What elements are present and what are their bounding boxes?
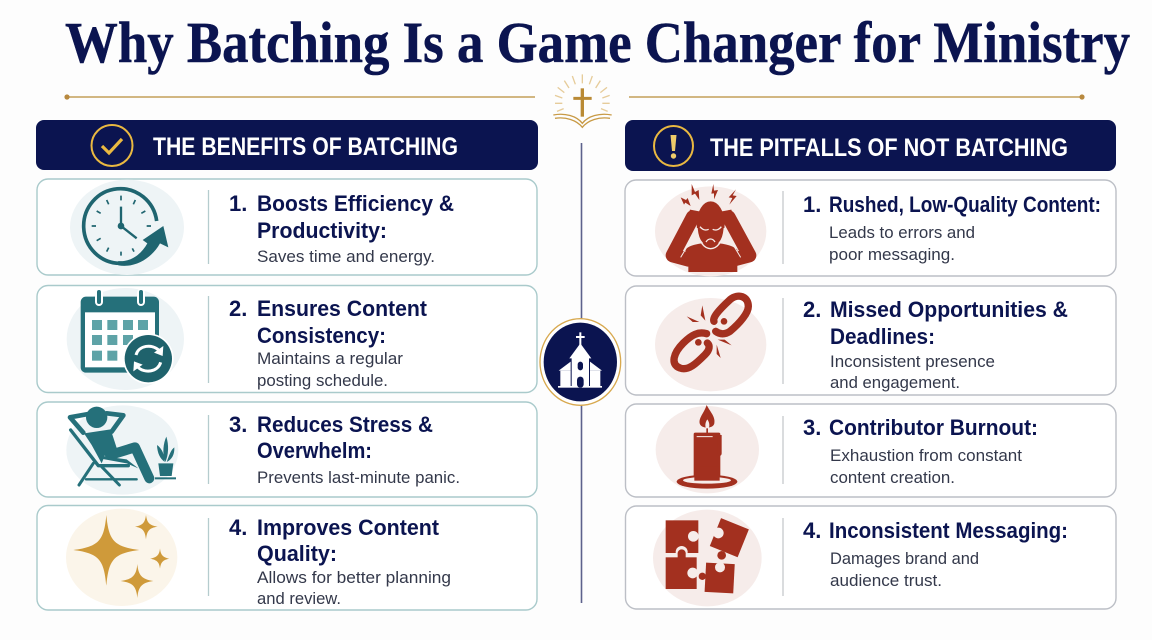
text: pitfall 2: 2.: [803, 297, 821, 322]
card: improves quality: [37, 506, 537, 610]
text: pitfall 4: [803, 518, 1068, 590]
text: benefit 4: [229, 515, 451, 608]
text: benefit 4: and review.: [257, 589, 341, 608]
text: pitfall 4: audience trust.: [830, 571, 942, 590]
icon: stressed person: [655, 184, 766, 276]
text: pitfall 3: content creation.: [830, 468, 955, 487]
text: pitfall 3: [803, 415, 1038, 487]
text: pitfall 2: Inconsistent presence: [830, 352, 995, 371]
text: pitfall 3: 3.: [803, 415, 821, 440]
panel: benefits: [36, 120, 538, 610]
text: pitfall 4: Damages brand and: [830, 549, 979, 568]
icon: gold sparkles: [66, 509, 177, 606]
text: benefit 3: Reduces Stress &: [257, 412, 433, 437]
center divider line: [580, 143, 582, 603]
icon: relaxing person in deck chair: [66, 405, 178, 495]
benefits header: THE BENEFITS OF BATCHING: [153, 133, 458, 161]
card: contributor burnout: [626, 404, 1116, 497]
text: benefit 2: Consistency:: [257, 323, 386, 348]
text: benefit 4: Allows for better planning: [257, 568, 451, 587]
text: benefit 3: [229, 412, 460, 487]
icon: exclamation mark: [654, 126, 693, 166]
icon: melting candle: [656, 405, 759, 493]
text: pitfall 3: Contributor Burnout:: [829, 415, 1038, 440]
text: benefit 4: Improves Content: [257, 515, 440, 540]
text: benefit 2: posting schedule.: [257, 371, 388, 390]
text: pitfall 2: Missed Opportunities &: [830, 297, 1068, 322]
icon: cross and open book emblem: [553, 74, 612, 127]
text: pitfall 3: Exhaustion from constant: [830, 446, 1022, 465]
card: missed opportunities: [626, 286, 1116, 395]
icon: check mark: [92, 125, 132, 166]
left title rule: [64, 94, 535, 100]
text: pitfall 1: Leads to errors and: [829, 223, 975, 242]
pitfalls header: THE PITFALLS OF NOT BATCHING: [710, 134, 1068, 162]
right title rule: [629, 94, 1085, 100]
text: benefit 1: Boosts Efficiency &: [257, 191, 454, 216]
text: pitfall 4: Inconsistent Messaging:: [829, 518, 1068, 543]
text: pitfall 2: [803, 297, 1068, 392]
pitfalls header: [625, 120, 1116, 171]
text: benefit 2: Ensures Content: [257, 296, 428, 321]
icon: broken chain: [655, 296, 766, 391]
text: pitfall 1: Rushed, Low-Quality Content:: [829, 192, 1101, 217]
icon: church medallion: [540, 319, 621, 405]
text: benefit 2: Maintains a regular: [257, 349, 403, 368]
text: pitfall 1: 1.: [803, 192, 821, 217]
text: pitfall 2: Deadlines:: [830, 324, 935, 349]
text: benefit 2: 2.: [229, 296, 247, 321]
text: benefit 1: [229, 191, 454, 266]
text: benefit 3: Overwhelm:: [257, 438, 372, 463]
text: benefit 1: 1.: [229, 191, 247, 216]
text: benefit 3: 3.: [229, 412, 247, 437]
benefits header: [36, 120, 538, 170]
icon: scattered puzzle pieces: [653, 510, 762, 606]
panel: pitfalls: [625, 120, 1116, 609]
card: boosts efficiency: [37, 179, 537, 275]
text: pitfall 1: poor messaging.: [829, 245, 955, 264]
icon: calendar with sync: [67, 288, 184, 390]
card: rushed content: [625, 180, 1116, 276]
card: inconsistent messaging: [626, 506, 1116, 609]
text: pitfall 1: [803, 192, 1101, 264]
card: reduces stress: [37, 402, 537, 497]
text: benefit 4: Quality:: [257, 541, 337, 566]
text: benefit 1: Saves time and energy.: [257, 247, 435, 266]
text: benefit 2: [229, 296, 428, 390]
text: benefit 1: Productivity:: [257, 218, 387, 243]
icon: clock with arrow: [70, 180, 184, 275]
text: benefit 3: Prevents last-minute panic.: [257, 468, 460, 487]
card: content consistency: [37, 286, 537, 392]
text: pitfall 2: and engagement.: [830, 373, 960, 392]
text: benefit 4: 4.: [229, 515, 247, 540]
text: pitfall 4: 4.: [803, 518, 821, 543]
